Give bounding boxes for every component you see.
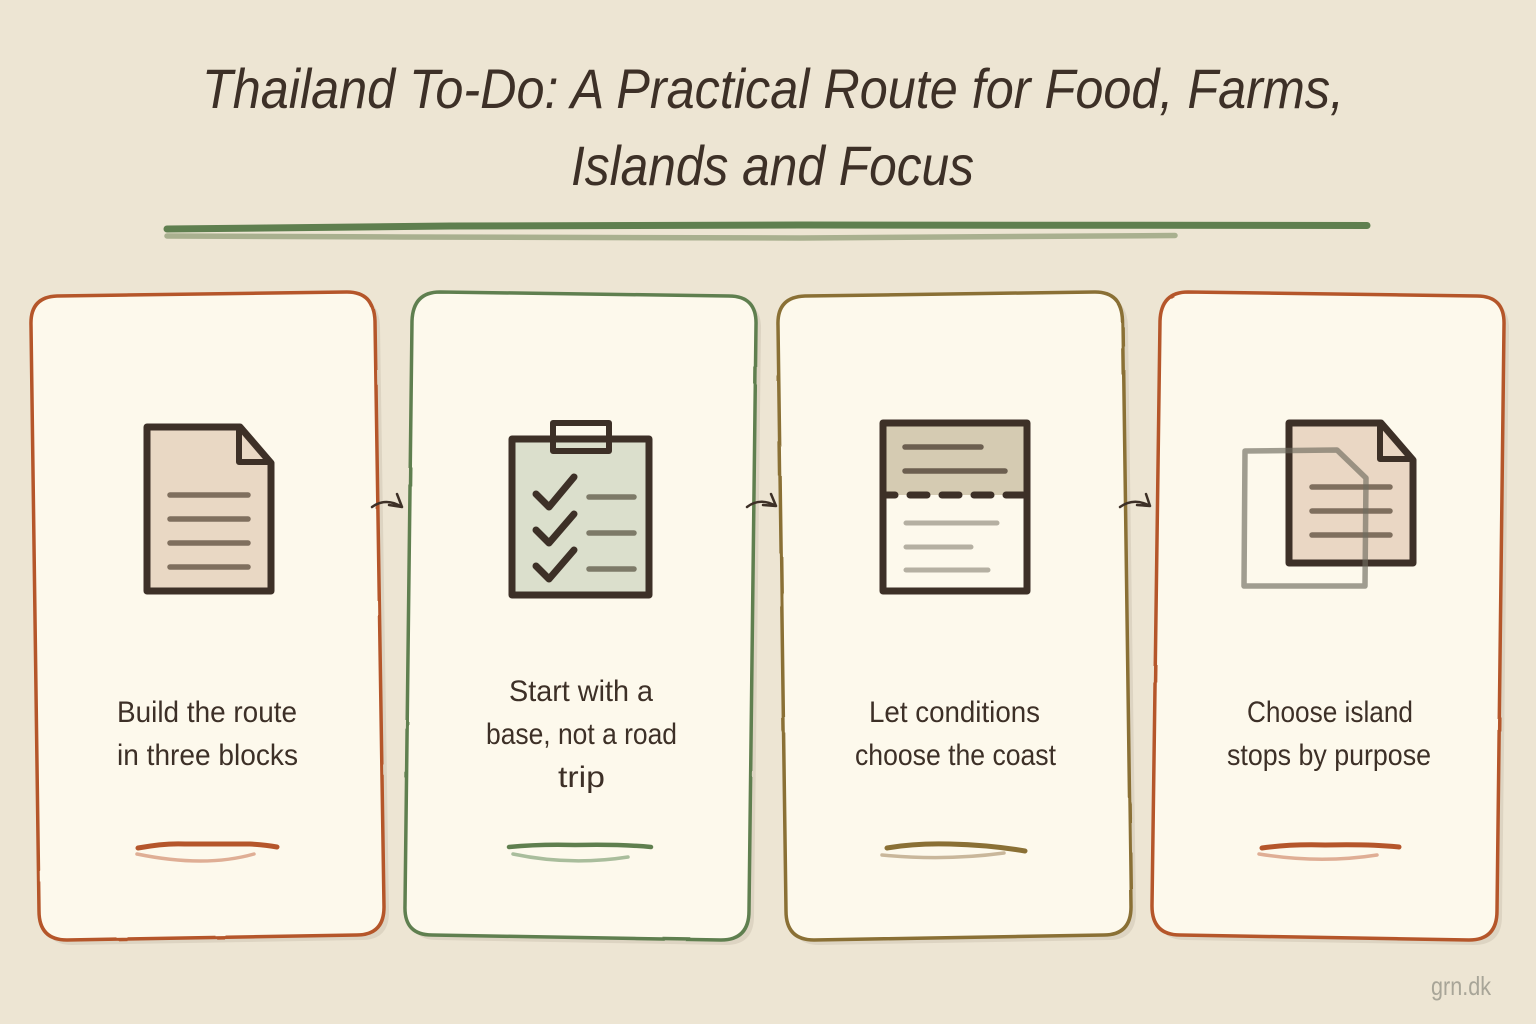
arrow 3 [1120,494,1150,507]
label: Choose island [1247,696,1413,729]
icon: overlapping documents [1244,423,1413,586]
card body [778,292,1131,940]
card body [405,292,756,940]
label: choose the coast [855,739,1057,772]
arrow 2 [747,494,776,507]
label: trip [558,761,605,794]
card shadow [1157,297,1509,945]
icon: split page [883,423,1027,591]
panel: start with a base [405,292,761,945]
accent strokes [1259,845,1399,859]
accent strokes [882,844,1025,858]
arrow 1 [372,494,402,507]
label: base, not a road [486,718,677,751]
icon: clipboard checklist [512,423,649,595]
label: Build the route [117,696,297,729]
label: Let conditions [869,696,1040,729]
card body [1152,292,1504,940]
accent strokes [509,845,651,861]
icon: document [147,427,271,591]
label [117,696,298,772]
title [202,57,1344,197]
label [855,696,1057,772]
title: Thailand To-Do: A Practical Route for Food, Farms, [202,57,1344,120]
panel: choose island stops [1152,292,1509,945]
title: Islands and Focus [571,134,974,197]
label: Start with a [509,675,653,708]
panel: build the route [31,292,389,945]
card body [31,292,384,940]
card shadow [783,297,1136,945]
accent strokes [137,844,277,861]
label [486,675,677,794]
watermark: grn.dk [1431,971,1492,1001]
card shadow [410,297,761,945]
label: in three blocks [117,739,298,772]
label [1227,696,1431,772]
label: stops by purpose [1227,739,1431,772]
title underline [167,225,1367,238]
panel: let conditions choose [778,292,1136,945]
card shadow [36,297,389,945]
